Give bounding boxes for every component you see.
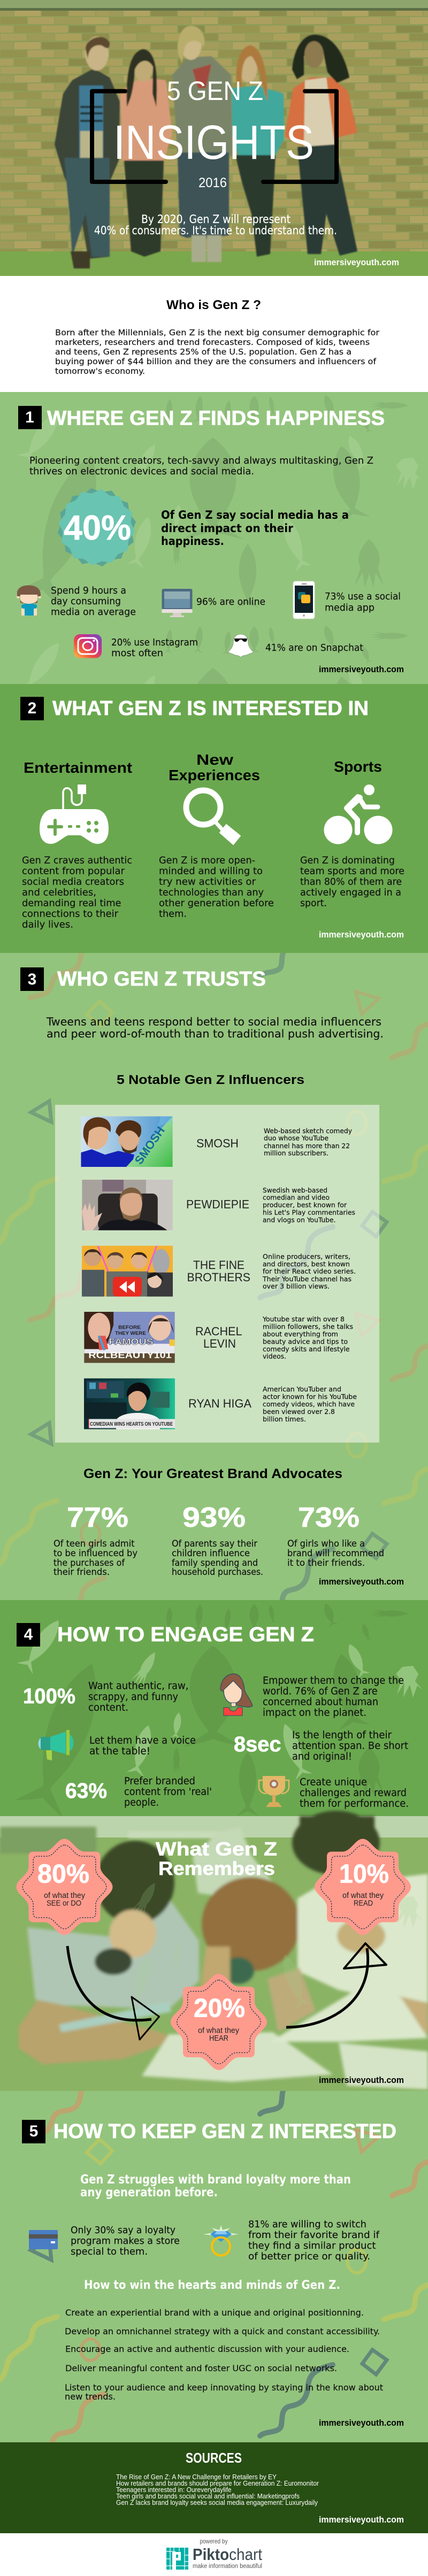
text: willing to switch: 81% are willing to switch <box>248 2219 366 2230</box>
source list: Gen Z lacks brand loyalty seeks social media engagement: Luxurydaily <box>116 2498 318 2506</box>
name: The Fine Brothers: BROTHERS <box>187 1271 250 1284</box>
powered by text: powered by <box>200 2537 228 2545</box>
bio: Smosh <box>264 1127 352 1157</box>
intro paragraph: Born after the Millennials, Gen Z is the next big consumer demographic for <box>55 328 379 337</box>
section intro <box>29 455 373 477</box>
stat column: 77%: their friends. <box>54 1567 110 1577</box>
bio: PewDiePie: his Let's Play commentaries <box>263 1208 355 1216</box>
text: authentic content: scrappy, and funny <box>88 1691 178 1703</box>
stat column: 93% <box>172 1502 263 1577</box>
intro paragraph: buying power of $44 billion and they are the consumers and influencers of <box>55 357 377 366</box>
thumbnail: Rachel Levin: THEY WERE <box>115 1331 146 1336</box>
subheading: new experiences <box>169 751 260 783</box>
text: entertainment: daily lives. <box>22 919 73 930</box>
text: branded content <box>124 1776 212 1809</box>
stat text: Of Gen Z say social media has a <box>161 509 349 522</box>
text: willing to switch: they find a similar product <box>248 2241 376 2251</box>
source list: The Rise of Gen Z: A New Challenge for Retailers by EY <box>116 2473 277 2481</box>
panel: hero photo header <box>0 0 428 276</box>
number badge 2 <box>20 697 44 720</box>
bio: Smosh: duo whose YouTube <box>264 1134 328 1142</box>
section intro: any generation before. <box>80 2186 218 2200</box>
column: new experiences <box>159 751 274 919</box>
text: sports <box>300 855 404 909</box>
name: The Fine Brothers: THE FINE <box>193 1258 244 1272</box>
bio: The Fine Brothers: for their React video series. <box>263 1267 356 1275</box>
subheading: new experiences: New <box>196 751 233 768</box>
number badge 5 <box>22 2120 45 2143</box>
number badge 3 <box>20 967 44 991</box>
text: new experiences: technologies than any <box>159 887 264 898</box>
bio: Ryan Higa <box>263 1385 357 1423</box>
name: PewDiePie: PEWDIEPIE <box>186 1198 249 1211</box>
stat column: 73% <box>287 1502 384 1568</box>
callout: 80%: SEE or DO <box>47 1899 81 1908</box>
text: hours of media: day consuming <box>51 596 121 607</box>
panel: section 5 how to keep Gen Z interested <box>0 1808 428 2458</box>
panel: influencers list <box>55 1105 379 1443</box>
stat text <box>161 509 349 548</box>
text: branded content: content from 'real' <box>124 1787 212 1798</box>
icon: cyclist <box>324 785 393 844</box>
name: Smosh: SMOSH <box>196 1137 239 1150</box>
text: new experiences: them. <box>159 908 187 919</box>
stat: 63%: 63% <box>65 1779 107 1803</box>
bio: PewDiePie: and vlogs on YouTube. <box>263 1216 336 1224</box>
list: tactics: Develop an omnichannel strategy with a quick and constant accessibility. <box>65 2326 380 2336</box>
heading 2: WHAT GEN Z IS INTERESTED IN <box>52 697 369 720</box>
list: tactics: Deliver meaningful content and foster UGC on social networks. <box>65 2363 337 2373</box>
stat: 100%: 100% <box>23 1685 75 1708</box>
text: willing to switch <box>248 2219 380 2262</box>
number badge 1: 1 <box>25 409 34 426</box>
name: Rachel Levin <box>195 1325 242 1350</box>
panel: section 4 how to engage Gen Z <box>0 1600 428 1818</box>
bio: The Fine Brothers: Online producers, writers, <box>263 1252 350 1260</box>
icon: woman <box>220 1674 253 1716</box>
bio: Ryan Higa: been viewed over 2.8 <box>263 1408 335 1416</box>
icon: piktochart logo <box>166 2548 188 2570</box>
bio: Rachel Levin: about everything from <box>263 1330 338 1338</box>
thumbnail: Rachel Levin: BEFORE <box>118 1325 141 1330</box>
heading: what Gen Z remembers <box>156 1839 277 1879</box>
site credit: immersiveyouth.com <box>319 2515 404 2525</box>
text: entertainment: Gen Z craves authentic <box>22 855 132 866</box>
section intro: Gen Z struggles with brand loyalty more than <box>80 2173 351 2187</box>
callout: 10%: READ <box>354 1899 373 1908</box>
heading 1: WHERE GEN Z FINDS HAPPINESS <box>47 407 385 430</box>
text: instagram <box>111 637 198 659</box>
stat column: 73%: brand will recommend <box>287 1548 384 1558</box>
arrow: from 20% to 10% <box>286 1943 386 2027</box>
icon: diamond ring <box>203 2225 239 2256</box>
section background <box>0 684 428 953</box>
list: tactics: Encourage an active and authentic discussion with your audience. <box>65 2344 349 2354</box>
text: sports: sport. <box>300 897 327 909</box>
source list: Teen girls and brands social vocal and influential: Marketingprofs <box>116 2492 300 2500</box>
list: tactics <box>65 2308 383 2402</box>
stat column: 73%: Of girls who like a <box>287 1539 365 1549</box>
subheading: sports: Sports <box>334 758 382 775</box>
text: social app: media app <box>325 602 374 613</box>
intro paragraph <box>55 328 379 376</box>
stat column: 77%: to be influenced by <box>54 1548 137 1558</box>
panel: section 1 where Gen Z finds happiness <box>0 392 428 841</box>
stat column: 93%: household purchases. <box>172 1567 263 1577</box>
panel background <box>0 276 428 392</box>
thumbnail: PewDiePie <box>82 1180 173 1231</box>
icon: loyalty card <box>29 2230 58 2249</box>
text: social app: 73% use a social <box>325 591 401 602</box>
subheading: notable influencers: 5 Notable Gen Z Influencers <box>117 1073 304 1087</box>
photo: teens studying on grass <box>0 1602 428 2091</box>
icon: trophy <box>259 1776 289 1807</box>
source list: How retailers and brands should prepare for Generation Z: Euromonitor <box>116 2479 319 2487</box>
bio: Rachel Levin: Youtube star with over 8 <box>262 1315 345 1323</box>
text: hours of media: media on average <box>51 606 136 618</box>
sources background <box>0 2442 428 2533</box>
icon: game controller <box>40 785 109 844</box>
stat column: 77%: the purchases of <box>54 1558 125 1568</box>
text: sports: team sports and more <box>300 865 404 876</box>
site credit: immersiveyouth.com <box>319 2075 404 2085</box>
section intro: thrives on electronic devices and social media. <box>29 466 254 477</box>
thumbnail: Rachel Levin: RCLBEAUTY101 <box>88 1350 172 1360</box>
source list: Teenagers interested in: Oureverydaylife <box>116 2486 232 2494</box>
number badge 5: 5 <box>29 2123 38 2140</box>
source list <box>116 2473 319 2506</box>
bio: Rachel Levin <box>262 1315 353 1360</box>
text: attention span: attention span. Be short <box>292 1741 409 1752</box>
callout: 20%: 20% <box>194 1994 245 2023</box>
text: willing to switch: of better price or quality. <box>248 2251 370 2262</box>
text: sports: than 80% of them are <box>300 876 402 887</box>
heading 4: HOW TO ENGAGE GEN Z <box>57 1624 314 1646</box>
bracket frame left <box>92 91 166 182</box>
section background <box>0 2091 428 2442</box>
intro paragraph: and teens, Gen Z represents 25% of the U.S. population. Gen Z has a <box>55 347 351 357</box>
subheading: entertainment: Entertainment <box>24 759 132 776</box>
text: instagram: 20% use Instagram <box>111 637 198 648</box>
text: empower: Empower them to change the <box>263 1675 404 1687</box>
bio: The Fine Brothers <box>262 1252 356 1290</box>
text: entertainment: demanding real time <box>22 897 121 909</box>
stat column: 93%: 93% <box>182 1502 246 1533</box>
intro paragraph: tomorrow's economy. <box>55 366 145 376</box>
heading: who is Gen Z: Who is Gen Z ? <box>166 298 261 312</box>
bio: Rachel Levin: beauty advice and tips to <box>263 1337 348 1345</box>
text: empower: concerned about human <box>263 1697 378 1708</box>
text: loyalty program: Only 30% say a loyalty <box>71 2225 175 2236</box>
bio: PewDiePie: producer, best known for <box>263 1201 347 1209</box>
name: Ryan Higa: RYAN HIGA <box>188 1397 251 1410</box>
bio: The Fine Brothers: Their YouTube channel has <box>262 1275 351 1283</box>
list background <box>55 1105 379 1443</box>
title: Insights: INSIGHTS <box>113 116 314 170</box>
text: loyalty program: program makes a store <box>71 2236 180 2247</box>
bio: Ryan Higa: actor known for his YouTube <box>263 1393 357 1401</box>
callout: 10% <box>315 1839 411 1935</box>
icon: megaphone <box>39 1730 74 1760</box>
number badge 2: 2 <box>28 699 36 717</box>
list: tactics: Listen to your audience and keep innovating by staying in the know about <box>65 2382 383 2393</box>
number badge 3: 3 <box>28 971 36 988</box>
list: tactics: Create an experiential brand with a unique and original positionning. <box>65 2308 364 2318</box>
heading 3: WHO GEN Z TRUSTS <box>57 968 266 990</box>
panel: who is Gen Z <box>0 276 428 392</box>
icon: smartphone <box>293 581 315 619</box>
subheading: new experiences: Experiences <box>169 767 260 783</box>
name: The Fine Brothers <box>187 1258 250 1284</box>
text: entertainment: and celebrities, <box>22 887 96 898</box>
text: entertainment: content from popular <box>22 865 125 876</box>
text: branded content: Prefer branded <box>124 1776 195 1787</box>
section background <box>0 392 428 684</box>
text: sports: Gen Z is dominating <box>300 855 395 866</box>
text: willing to switch: from their favorite brand if <box>248 2230 380 2241</box>
section intro <box>80 2173 351 2200</box>
text: entertainment <box>22 855 132 930</box>
callout: 20%: HEAR <box>209 2034 228 2043</box>
subheading: brand advocates: Gen Z: Your Greatest Brand Advocates <box>83 1466 342 1481</box>
number badge 4: 4 <box>24 1626 33 1643</box>
site credit: immersiveyouth.com <box>319 2418 404 2428</box>
text: attention span: and original! <box>292 1751 352 1763</box>
section intro: Tweens and teens respond better to social media influencers <box>46 1015 381 1028</box>
list: tactics: new trends. <box>65 2392 116 2402</box>
panel: footer <box>0 2533 428 2576</box>
icon: magnifying glass <box>186 790 240 844</box>
text: authentic content: content. <box>88 1702 128 1713</box>
number badge 4 <box>17 1623 40 1647</box>
section intro: and peer word-of-mouth than to traditional push advertising. <box>47 1027 384 1040</box>
logo wordmark: Piktochart <box>193 2545 262 2564</box>
text: empower: world. 76% of Gen Z are <box>263 1686 378 1697</box>
number badge 1 <box>18 406 42 429</box>
column: entertainment <box>22 759 132 930</box>
text: challenges: them for performance. <box>300 1798 409 1809</box>
text: new experiences: minded and willing to <box>159 865 263 876</box>
callout: 20%: of what they <box>198 2026 239 2035</box>
section background <box>0 1600 428 1816</box>
icon: snapchat ghost <box>228 634 254 657</box>
thumbnail: Rachel Levin: FAMOUS <box>109 1337 154 1347</box>
site credit: immersiveyouth.com <box>319 664 404 674</box>
thumbnail: Smosh: SMOSH <box>132 1124 167 1167</box>
icon: desktop monitor <box>162 589 193 617</box>
subheading: hearts and minds: How to win the hearts and minds of Gen Z. <box>84 2279 340 2292</box>
text: hours of media <box>51 585 136 618</box>
callout: 80%: 80% <box>37 1860 89 1889</box>
callout: 80%: of what they <box>44 1891 85 1900</box>
site credit: immersiveyouth.com <box>319 1577 404 1587</box>
bio: PewDiePie <box>263 1186 355 1224</box>
text: social app <box>325 591 401 613</box>
stat badge: 40%: 40% <box>64 508 131 547</box>
thumbnail: Smosh <box>81 1117 173 1167</box>
site credit: immersiveyouth.com <box>314 257 399 267</box>
stat column: 77%: Of teen girls admit <box>54 1539 135 1549</box>
text: challenges <box>300 1777 409 1809</box>
photo: teens against brick wall <box>0 0 428 276</box>
logo tagline: make information beautiful <box>193 2563 262 2570</box>
column: sports <box>300 758 404 909</box>
bracket frame right <box>263 91 337 182</box>
bio: PewDiePie: comedian and video <box>263 1194 330 1202</box>
bio: Smosh: million subscribers. <box>264 1149 328 1157</box>
text: attention span <box>292 1730 409 1763</box>
bio: PewDiePie: Swedish web-based <box>263 1186 327 1194</box>
text: authentic content <box>88 1681 188 1713</box>
heading: sources: SOURCES <box>186 2450 242 2466</box>
heading: what Gen Z remembers: Remembers <box>158 1858 275 1879</box>
thumbnail: Rachel Levin <box>84 1312 175 1363</box>
site credit: immersiveyouth.com <box>319 929 404 940</box>
bio: Rachel Levin: comedy skits and lifestyle <box>263 1345 350 1353</box>
hero tagline: 40% of consumers. It's time to understand them. <box>94 224 337 237</box>
section intro <box>46 1015 384 1040</box>
arrow: from 80% to 20% <box>67 1946 159 2040</box>
icon: boy <box>17 585 41 616</box>
title: 5 Gen Z: 5 GEN Z <box>167 76 263 106</box>
text: empower: impact on the planet. <box>263 1708 366 1719</box>
text: instagram: most often <box>111 648 163 659</box>
panel: sources <box>0 2442 428 2533</box>
bio: Rachel Levin: million followers, she talks <box>263 1322 353 1331</box>
text: new experiences: Gen Z is more open- <box>159 855 255 866</box>
bio: The Fine Brothers: and directors, best known <box>263 1260 350 1268</box>
hero tagline <box>94 213 337 237</box>
stat text: direct impact on their <box>161 522 293 535</box>
bio: Smosh: Web-based sketch comedy <box>264 1127 352 1135</box>
text: challenges: challenges and reward <box>300 1787 407 1798</box>
stat column: 73%: it to their friends. <box>287 1558 365 1568</box>
text: new experiences: other generation before <box>159 897 274 909</box>
callout: 80% <box>16 1839 112 1935</box>
text: voice: at the table! <box>89 1746 150 1757</box>
year: 2016 <box>198 175 227 190</box>
text: voice <box>89 1735 196 1757</box>
text: branded content: people. <box>124 1797 159 1809</box>
text: empower <box>263 1675 404 1719</box>
stat column: 93%: Of parents say their <box>172 1539 258 1549</box>
thumbnail: Ryan Higa <box>84 1379 175 1429</box>
callout: 10%: of what they <box>342 1891 384 1900</box>
stat text: happiness. <box>161 535 224 548</box>
hero tagline: By 2020, Gen Z will represent <box>141 213 291 226</box>
bio: Ryan Higa: American YouTuber and <box>263 1385 341 1393</box>
bio: Rachel Levin: videos. <box>263 1352 286 1360</box>
stat column: 93%: family spending and <box>172 1558 258 1568</box>
heading 5: HOW TO KEEP GEN Z INTERESTED <box>54 2120 396 2143</box>
name: Rachel Levin: RACHEL <box>195 1325 242 1338</box>
text: new experiences <box>159 855 274 919</box>
footer background <box>0 2533 428 2576</box>
bio: Smosh: channel has more than 22 <box>264 1142 350 1150</box>
intro paragraph: marketers, researchers and trend forecasters. Composed of kids, tweens <box>55 337 370 347</box>
stat column: 77%: 77% <box>67 1502 128 1533</box>
text: snapchat: 41% are on Snapchat <box>265 642 363 653</box>
text: voice: Let them have a voice <box>89 1735 196 1747</box>
text: new experiences: try new activities or <box>159 876 256 887</box>
callout: 20% <box>171 1974 267 2070</box>
section intro: Pioneering content creators, tech-savvy and always multitasking, Gen Z <box>29 455 373 466</box>
panel: what Gen Z remembers photo <box>0 1602 428 2091</box>
text: sports: actively engaged in a <box>300 887 401 898</box>
heading: what Gen Z remembers: What Gen Z <box>156 1839 277 1860</box>
icon: instagram logo <box>74 634 102 658</box>
stat badge: 40% <box>52 482 142 572</box>
stat: 8sec: 8sec <box>234 1733 281 1756</box>
text: entertainment: social media creators <box>22 876 124 887</box>
text: attention span: Is the length of their <box>292 1730 392 1741</box>
panel: section 3 who Gen Z trusts <box>0 670 428 1642</box>
thumbnail: The Fine Brothers <box>82 1246 173 1296</box>
name: Rachel Levin: LEVIN <box>203 1337 236 1350</box>
text: authentic content: Want authentic, raw, <box>88 1681 188 1692</box>
text: online: 96% are online <box>196 596 265 608</box>
text: entertainment: connections to their <box>22 908 118 919</box>
section background <box>0 953 428 1600</box>
text: challenges: Create unique <box>300 1777 367 1788</box>
text: loyalty program: special to them. <box>71 2247 148 2257</box>
stat column: 77% <box>54 1502 137 1577</box>
panel: section 2 what Gen Z is interested in <box>0 684 428 953</box>
bio: Ryan Higa: comedy videos, which have <box>263 1400 355 1408</box>
text: hours of media: Spend 9 hours a <box>51 585 126 596</box>
stat column: 93%: children influence <box>172 1548 250 1558</box>
bio: Ryan Higa: billion times. <box>263 1415 306 1423</box>
stat column: 73%: 73% <box>298 1502 360 1533</box>
text: loyalty program <box>71 2225 180 2257</box>
callout: 10%: 10% <box>339 1860 389 1889</box>
bio: The Fine Brothers: over 3 billion views. <box>263 1282 330 1290</box>
